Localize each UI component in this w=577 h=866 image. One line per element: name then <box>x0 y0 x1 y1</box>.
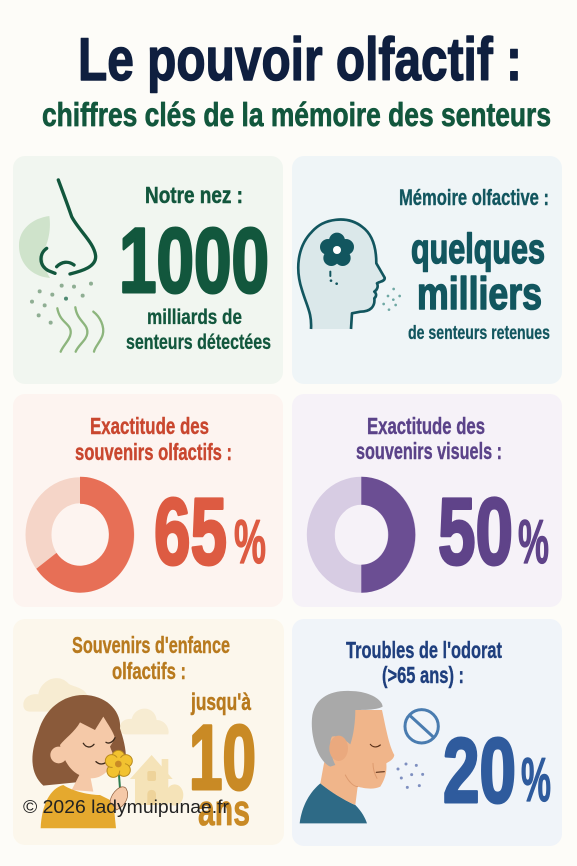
value 65: 65 <box>154 479 227 585</box>
value label: jusqu'à <box>190 689 251 716</box>
heading line 1: Exactitude des <box>367 413 485 439</box>
panel: souvenirs d'enfance <box>13 619 284 845</box>
value 20: 20 <box>443 720 516 822</box>
heading line 2: (>65 ans) : <box>382 662 464 688</box>
heading line 1: Souvenirs d'enfance <box>72 632 230 658</box>
heading line 2: souvenirs olfactifs : <box>75 439 232 465</box>
heading line 2: souvenirs visuels : <box>356 438 502 464</box>
donut chart 65% <box>36 477 134 593</box>
illustration: child smelling a flower <box>23 678 183 828</box>
percent sign: % <box>234 508 266 577</box>
big word 2: milliers <box>417 268 542 319</box>
heading line 2: olfactifs : <box>112 658 186 684</box>
panel: souvenirs olfactifs <box>13 394 283 607</box>
heading: Notre nez : <box>145 182 243 208</box>
percent sign: % <box>521 746 551 815</box>
value 10: 10 <box>189 707 256 809</box>
panel: mémoire olfactive <box>292 156 562 384</box>
heading line 1: Troubles de l'odorat <box>346 637 502 663</box>
panel: troubles de l'odorat <box>292 619 562 846</box>
panel: notre nez <box>13 156 283 384</box>
icon: nose with scent <box>19 180 103 352</box>
icon: head with flower <box>298 220 401 329</box>
big number: 1000 <box>119 210 269 312</box>
donut chart 50% <box>321 477 415 593</box>
percent sign: % <box>518 508 549 577</box>
value 50: 50 <box>438 479 513 585</box>
unit: ans <box>198 786 250 835</box>
illustration: older man in profile <box>300 691 438 823</box>
copyright watermark: © 2026 ladymuipunae.fr <box>23 796 229 817</box>
panel: souvenirs visuels <box>292 394 562 607</box>
heading line 1: Exactitude des <box>90 413 209 439</box>
caption line 2: senteurs détectées <box>126 331 271 354</box>
caption line 1: milliards de <box>147 306 242 329</box>
